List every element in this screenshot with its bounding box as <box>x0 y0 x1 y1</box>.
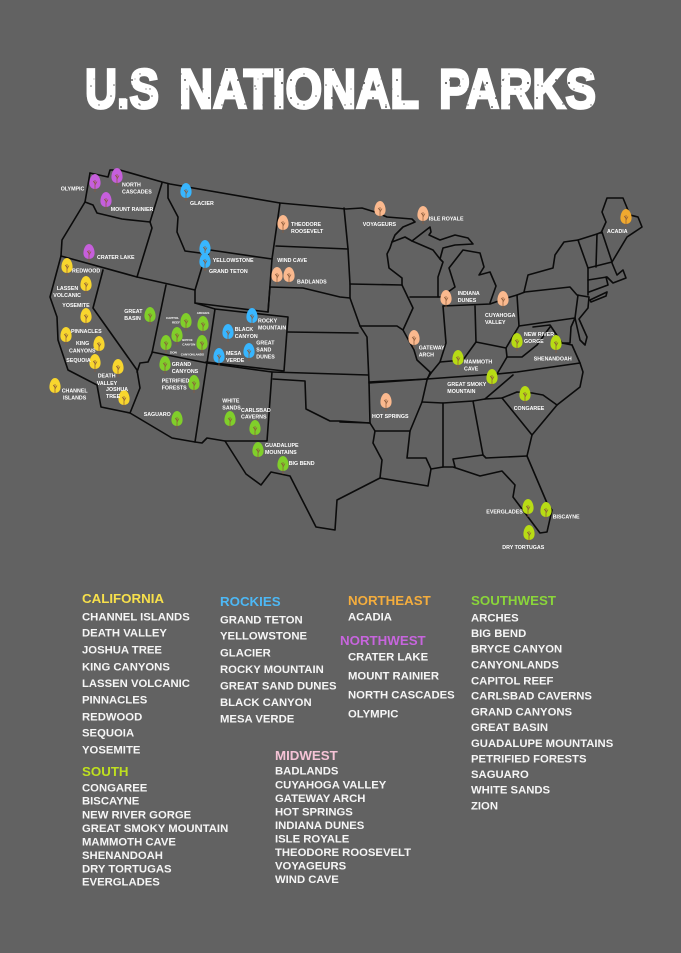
pin: Zion <box>160 335 177 354</box>
map pins and labels <box>49 168 632 551</box>
list: California: YOSEMITE <box>82 744 141 756</box>
pin: Grand Canyons: GRAND <box>172 362 191 368</box>
list: California: KING CANYONS <box>82 661 170 673</box>
pin: Gateway Arch: ARCH <box>419 352 434 358</box>
list: California: SEQUOIA <box>82 728 134 740</box>
list: South: BISCAYNE <box>82 796 140 808</box>
pin: Great Sand Dunes: GREAT <box>256 340 275 346</box>
pin: Cuyahoga Valley: VALLEY <box>485 320 506 326</box>
pin: New River Gorge <box>511 332 554 351</box>
pin: Grand Canyons: CANYONS <box>172 369 199 375</box>
pin: North Cascades <box>111 168 152 196</box>
pin: Wind Cave: WIND CAVE <box>277 258 308 264</box>
list: Rockies: MESA VERDE <box>220 714 295 726</box>
list: Midwest: HOT SPRINGS <box>275 806 353 818</box>
pin: Yellowstone <box>199 240 254 264</box>
list: Southwest: GRAND CANYONS <box>471 706 573 718</box>
pin: Olympic <box>61 174 101 193</box>
pin: White Sands: SANDS <box>222 406 241 412</box>
list: Southwest: ZION <box>471 800 498 812</box>
pin: Carlsbad Caverns: CARLSBAD <box>241 408 271 414</box>
pin: Arches <box>197 311 209 334</box>
pin: North Cascades: CASCADES <box>122 190 152 196</box>
pin: Indiana Dunes <box>440 290 480 308</box>
pin: Great Smoky Mountain: MOUNTAIN <box>447 389 476 395</box>
list: California: CALIFORNIA <box>82 591 164 606</box>
pin: Saguaro: SAGUARO <box>144 412 171 418</box>
pin: Indiana Dunes: DUNES <box>458 298 477 304</box>
pin: Mount Rainier: MOUNT RAINIER <box>111 207 154 213</box>
pin: Rocky Mountain: ROCKY <box>258 318 278 324</box>
pin: Death Valley: VALLEY <box>97 381 118 387</box>
pin: Congaree: CONGAREE <box>514 406 545 412</box>
list: South: SOUTH <box>82 764 129 779</box>
list: Northwest <box>340 633 455 720</box>
pin: White Sands <box>222 398 241 429</box>
pin: Voyageurs <box>363 201 397 228</box>
pin: Canyonlands: CANYONLANDS <box>181 353 204 357</box>
pin: Yosemite <box>62 303 92 326</box>
pin: Everglades <box>486 499 534 517</box>
pin: Badlands <box>283 267 327 286</box>
list: Southwest: BIG BEND <box>471 628 526 640</box>
list: Northeast: ACADIA <box>348 611 392 623</box>
pin: Petrified Forests: PETRIFIED <box>162 378 190 384</box>
list: California: JOSHUA TREE <box>82 644 162 656</box>
pin: Black Canyon: CANYON <box>235 334 258 340</box>
pin: Theodore Roosevelt: THEODORE <box>291 222 321 228</box>
pin: New River Gorge: NEW RIVER <box>524 332 554 338</box>
pin: Glacier: GLACIER <box>190 201 214 207</box>
pin: Lassen Volcanic: LASSEN <box>57 286 78 292</box>
list: Rockies: ROCKIES <box>220 594 281 609</box>
pin: Dry Tortugas: DRY TORTUGAS <box>502 545 545 551</box>
pin: King Canyons: KING <box>76 341 89 347</box>
pin: Petrified Forests <box>162 375 200 393</box>
pin: Big Bend <box>277 456 315 474</box>
pin: Mammoth Cave: CAVE <box>464 366 479 372</box>
list: Southwest: CARLSBAD CAVERNS <box>471 690 592 702</box>
list: Midwest <box>275 748 411 886</box>
title: NATIONAL <box>179 57 419 120</box>
pin: Petrified Forests: FORESTS <box>162 386 187 392</box>
pin: Black Canyon <box>222 324 258 342</box>
pin: Acadia: ACADIA <box>607 229 628 235</box>
list: Midwest: ISLE ROYALE <box>275 834 350 846</box>
pin: Great Basin: BASIN <box>124 316 141 322</box>
list: South: SHENANDOAH <box>82 850 163 862</box>
pin: Capitol Reef: REEF <box>172 321 180 325</box>
list: Midwest: BADLANDS <box>275 765 339 777</box>
list: Southwest: CAPITOL REEF <box>471 675 554 687</box>
pin: Shenandoah: SHENANDOAH <box>534 356 572 362</box>
pin: Bryce Canyon: BRYCE <box>182 338 193 342</box>
pin: White Sands: WHITE <box>222 398 240 404</box>
pin: Guadalupe Mountains: MOUNTAINS <box>265 450 297 456</box>
pin: Great Smoky Mountain <box>447 369 498 395</box>
pin: Cuyahoga Valley <box>485 291 516 326</box>
pin: Great Sand Dunes <box>243 340 275 361</box>
pin: Crater Lake: CRATER LAKE <box>97 255 135 261</box>
pin: Death Valley: DEATH <box>98 374 116 380</box>
pin: Isle Royale: ISLE ROYALE <box>429 216 464 222</box>
pin: Channel Islands: CHANNEL <box>62 388 88 394</box>
pin: Guadalupe Mountains: GUADALUPE <box>265 443 299 449</box>
pin: Theodore Roosevelt <box>277 215 324 235</box>
list: Midwest: INDIANA DUNES <box>275 820 365 832</box>
pin: Biscayne <box>540 502 580 520</box>
list: Midwest: MIDWEST <box>275 748 338 763</box>
pin: Biscayne: BISCAYNE <box>553 514 580 520</box>
list: Northwest: NORTH CASCADES <box>348 690 455 702</box>
pin: Theodore Roosevelt: ROOSEVELT <box>291 229 324 235</box>
pin: Channel Islands: ISLANDS <box>63 396 87 402</box>
pin: Grand Canyons <box>159 356 199 375</box>
pin: Voyageurs: VOYAGEURS <box>363 222 397 228</box>
list: South: CONGAREE <box>82 782 148 794</box>
pin: Carlsbad Caverns: CAVERNS <box>241 414 267 420</box>
pin: Rocky Mountain: MOUNTAIN <box>258 326 286 332</box>
pin: North Cascades: NORTH <box>122 182 141 188</box>
pin: Mesa Verde <box>213 348 245 366</box>
pin: Death Valley <box>97 359 124 387</box>
pin: Isle Royale <box>417 206 464 224</box>
pin: Yosemite: YOSEMITE <box>62 303 90 309</box>
pin: Hot Springs: HOT SPRINGS <box>372 414 409 420</box>
pin: Redwood: REDWOOD <box>72 268 100 274</box>
list: Rockies: YELLOWSTONE <box>220 630 307 642</box>
pin: Yellowstone: YELLOWSTONE <box>213 258 254 264</box>
list: Midwest: CUYAHOGA VALLEY <box>275 779 387 791</box>
list: Rockies: GLACIER <box>220 647 271 659</box>
list: South: NEW RIVER GORGE <box>82 809 192 821</box>
pin: Hot Springs <box>372 393 409 420</box>
list: South: MAMMOTH CAVE <box>82 836 176 848</box>
pin: Rocky Mountain <box>246 308 286 332</box>
pin: Bryce Canyon: CANYON <box>182 343 195 347</box>
list: California <box>82 591 190 756</box>
list: Southwest: BRYCE CANYON <box>471 644 562 656</box>
map of the United States <box>50 170 642 533</box>
list: Southwest: SAGUARO <box>471 769 529 781</box>
list: Southwest: GREAT BASIN <box>471 722 548 734</box>
title: U.S <box>85 57 159 120</box>
list: Rockies: GREAT SAND DUNES <box>220 680 337 692</box>
pin: Zion: ZION <box>170 350 177 354</box>
pin: Grand Teton <box>199 253 248 275</box>
list: Rockies <box>220 594 337 726</box>
pin: Congaree <box>514 386 545 412</box>
pin: Gateway Arch <box>408 330 445 358</box>
pin: Badlands: BADLANDS <box>297 280 327 286</box>
pin: Great Sand Dunes: SAND <box>256 348 271 354</box>
pin: Mammoth Cave: MAMMOTH <box>464 360 492 366</box>
pin: Guadalupe Mountains <box>252 442 299 460</box>
pin: New River Gorge: GORGE <box>524 339 544 345</box>
list: Northwest: CRATER LAKE <box>348 652 429 664</box>
list: Southwest <box>471 593 614 812</box>
list: Southwest: WHITE SANDS <box>471 784 551 796</box>
pin: Mount Rainier <box>100 192 154 213</box>
pin: Lassen Volcanic: VOLCANIC <box>53 293 81 299</box>
pin: Pinnacles <box>60 327 102 345</box>
list: Rockies: ROCKY MOUNTAIN <box>220 664 324 676</box>
list: California: PINNACLES <box>82 694 148 706</box>
list: Northeast: NORTHEAST <box>348 593 431 608</box>
pin: Lassen Volcanic <box>53 276 92 299</box>
pin: Joshua Tree <box>106 387 130 408</box>
list: Midwest: THEODORE ROOSEVELT <box>275 847 411 859</box>
title <box>80 57 602 120</box>
pin: Acadia <box>607 209 632 235</box>
pin: Crater Lake <box>83 244 135 262</box>
pin: Glacier <box>180 183 214 207</box>
list: Southwest: SOUTHWEST <box>471 593 556 608</box>
pin: Capitol Reef <box>166 313 192 331</box>
list: South <box>82 764 228 888</box>
pin: Joshua Tree: JOSHUA <box>106 387 128 393</box>
pin: Great Basin: GREAT <box>124 309 143 315</box>
pin: Great Basin <box>124 307 156 325</box>
list: Midwest: WIND CAVE <box>275 874 339 886</box>
pin: Indiana Dunes: INDIANA <box>458 291 480 297</box>
pin: Black Canyon: BLACK <box>235 327 253 333</box>
pin: Redwood <box>61 258 100 276</box>
pin: King Canyons: CANYONS <box>69 348 96 354</box>
list: Midwest: GATEWAY ARCH <box>275 793 365 805</box>
pin: Gateway Arch: GATEWAY <box>419 346 445 352</box>
list: Northwest: OLYMPIC <box>348 708 398 720</box>
pin: Arches: ARCHES <box>197 311 209 315</box>
pin: Grand Teton: GRAND TETON <box>209 269 248 275</box>
pin: Pinnacles: PINNACLES <box>71 329 102 335</box>
pin: Big Bend: BIG BEND <box>289 461 315 467</box>
pin: Bryce Canyon <box>171 327 195 347</box>
pin: Joshua Tree: TREE <box>106 394 121 400</box>
list: Northwest: MOUNT RAINIER <box>348 670 439 682</box>
list: California: CHANNEL ISLANDS <box>82 611 190 623</box>
list: South: GREAT SMOKY MOUNTAIN <box>82 823 228 835</box>
list: Northeast <box>348 593 431 623</box>
pin: Sequoia <box>66 354 101 372</box>
list: California: REDWOOD <box>82 711 142 723</box>
list: South: DRY TORTUGAS <box>82 864 172 876</box>
list: Rockies: BLACK CANYON <box>220 697 312 709</box>
pin: Sequoia: SEQUOIA <box>66 358 91 364</box>
pin: Canyonlands <box>181 335 208 357</box>
pin: Olympic: OLYMPIC <box>61 187 85 193</box>
list: Southwest: ARCHES <box>471 612 519 624</box>
pin: King Canyons <box>69 336 105 354</box>
list: Southwest: PETRIFIED FORESTS <box>471 754 587 766</box>
pin: Great Smoky Mountain: GREAT SMOKY <box>447 382 487 388</box>
list: California: LASSEN VOLCANIC <box>82 678 190 690</box>
pin: Carlsbad Caverns <box>241 408 271 438</box>
list: California: DEATH VALLEY <box>82 628 167 640</box>
pin: Channel Islands <box>49 378 88 402</box>
pin: Everglades: EVERGLADES <box>486 510 523 516</box>
pin: Great Sand Dunes: DUNES <box>256 354 275 360</box>
list: Southwest: GUADALUPE MOUNTAINS <box>471 738 614 750</box>
pin: Dry Tortugas <box>502 525 545 551</box>
pin: Capitol Reef: CAPITOL <box>166 316 179 320</box>
pin: Mesa Verde: VERDE <box>226 358 245 364</box>
pin: Saguaro <box>144 411 183 429</box>
list: Southwest: CANYONLANDS <box>471 659 559 671</box>
title: PARKS <box>439 57 596 120</box>
list: Rockies: GRAND TETON <box>220 614 303 626</box>
pin: Mesa Verde: MESA <box>226 351 241 357</box>
pin: Mammoth Cave <box>452 350 492 372</box>
list: Northwest: NORTHWEST <box>340 633 426 648</box>
list: South: EVERGLADES <box>82 876 160 888</box>
pin: Cuyahoga Valley: CUYAHOGA <box>485 313 516 319</box>
list: Midwest: VOYAGEURS <box>275 860 347 872</box>
pin: Wind Cave <box>271 258 308 285</box>
pin: Shenandoah <box>534 335 572 362</box>
